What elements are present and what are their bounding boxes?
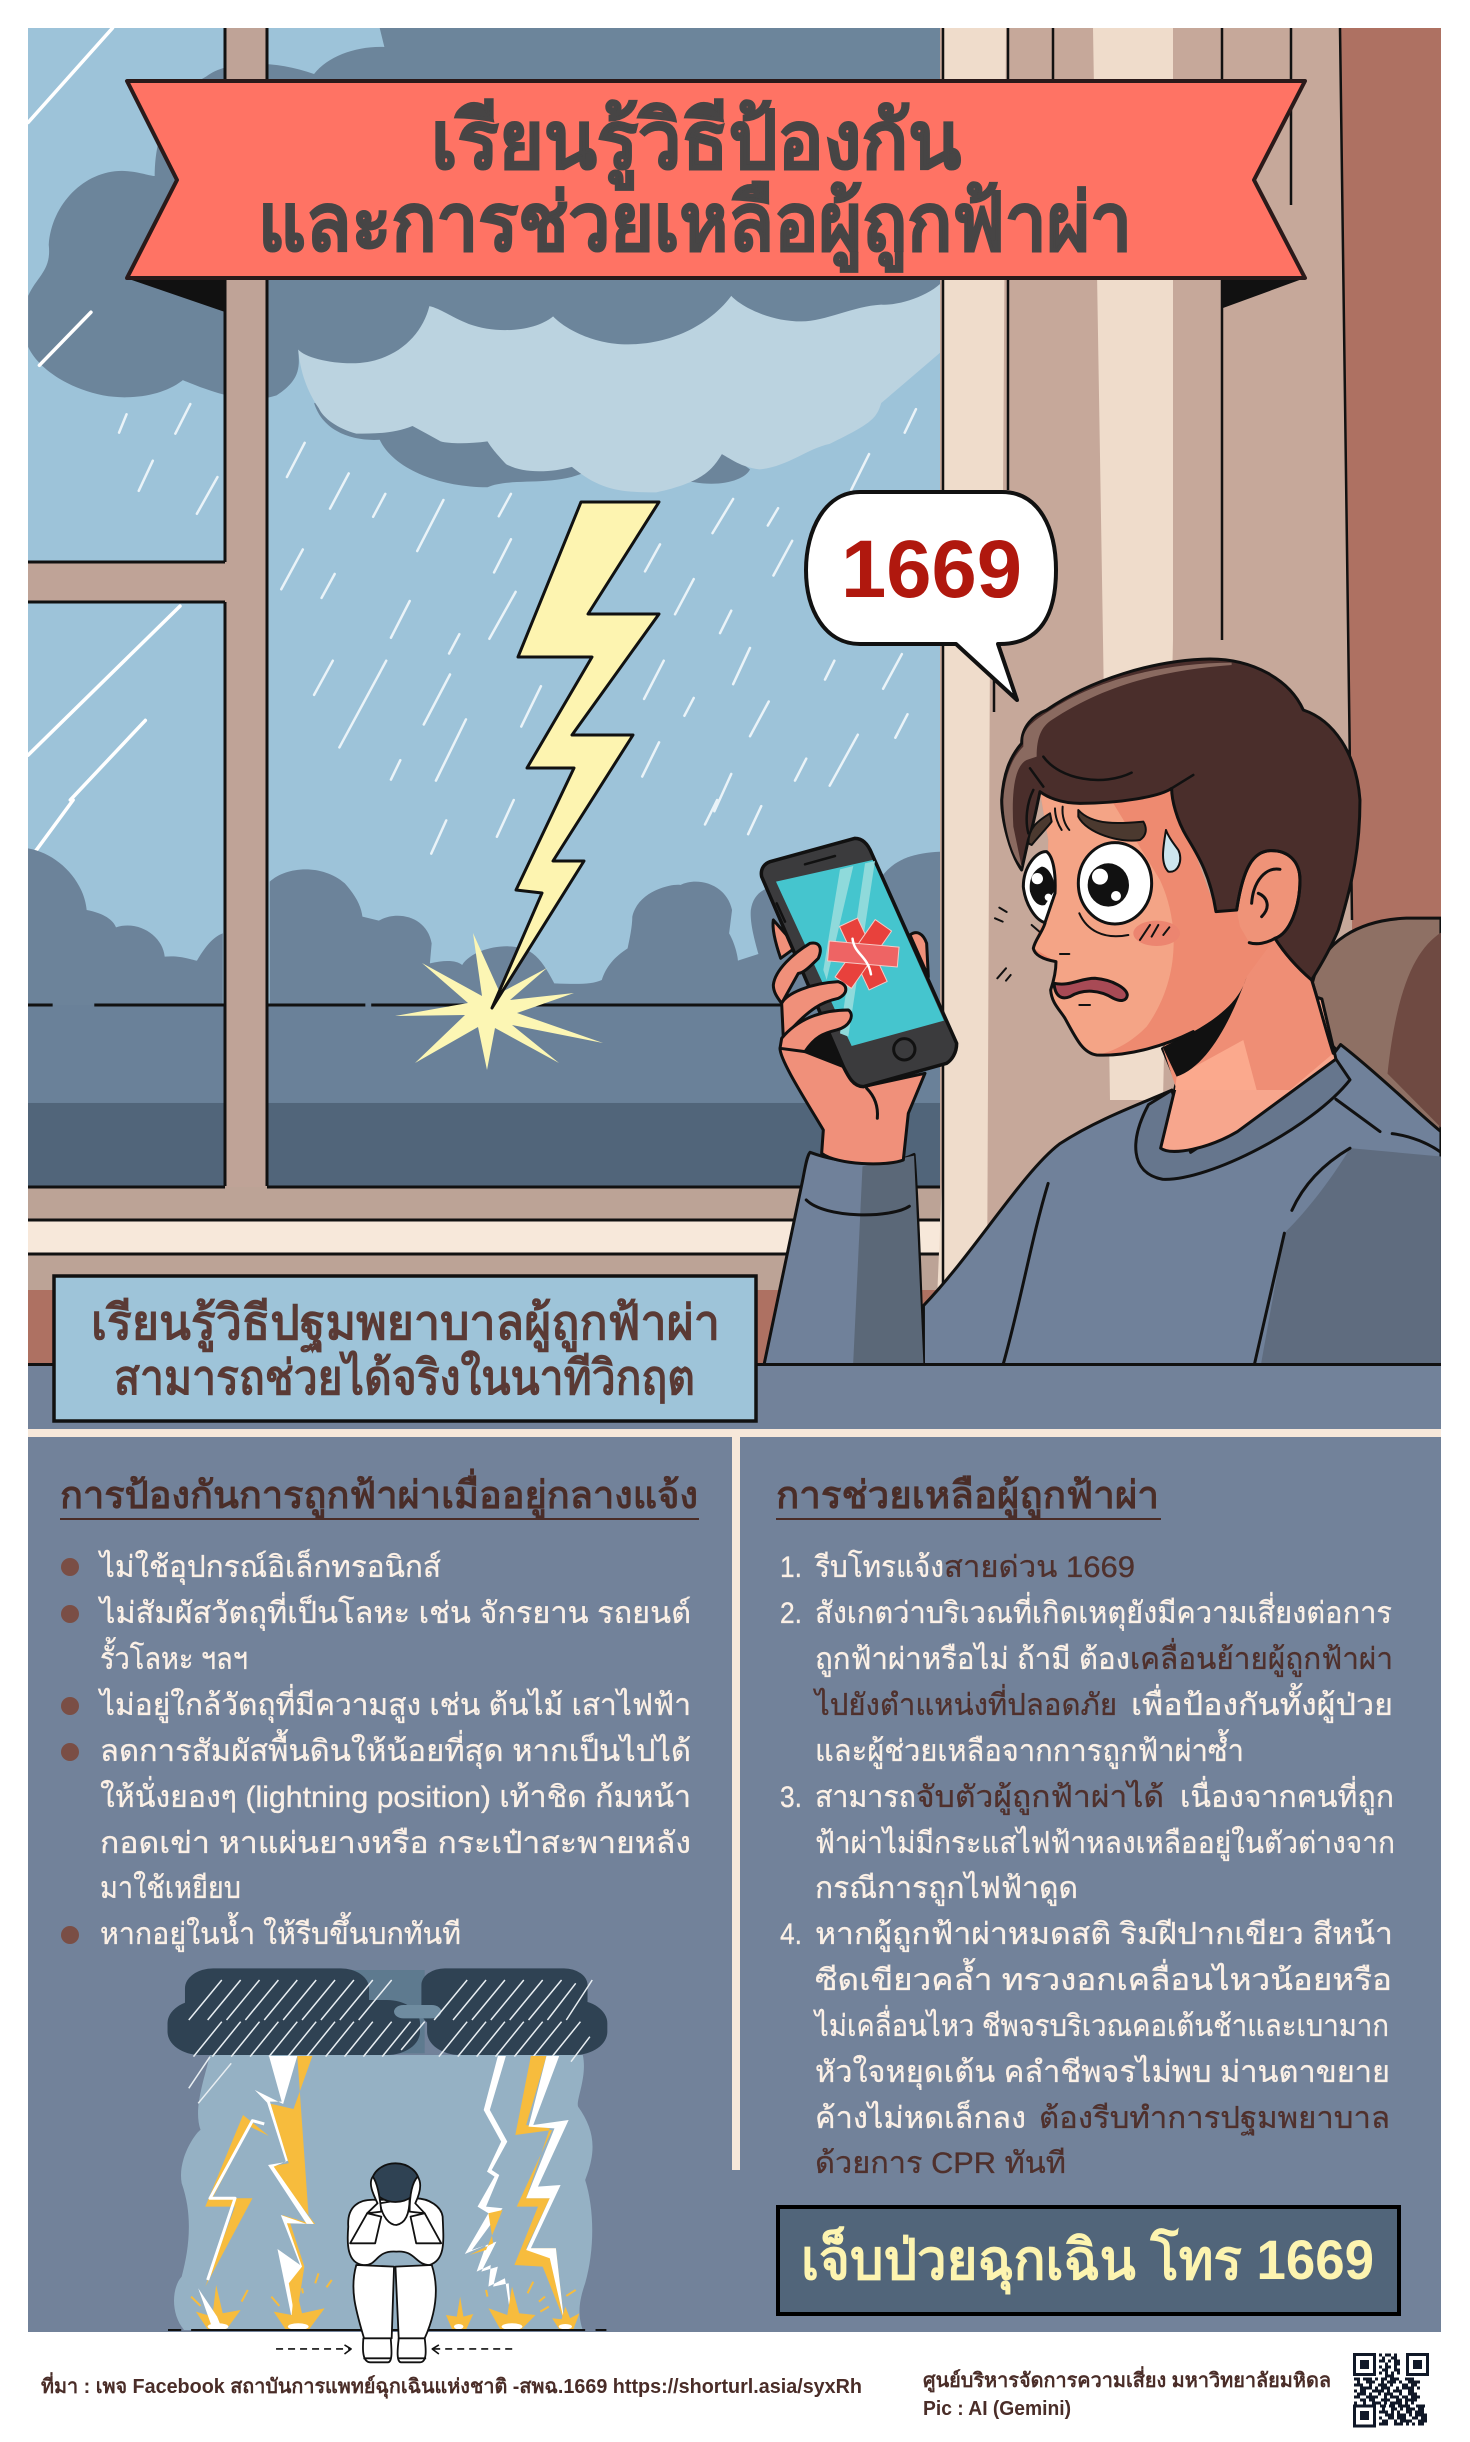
step 2: ถูกฟ้าผ่าหรือไม่ ถ้ามี ต้อง (815, 1641, 1130, 1677)
icon: smartphone (761, 838, 957, 1087)
distance arrows (276, 2345, 515, 2354)
step 1 (780, 1549, 1135, 1584)
bullet list: กอดเข่า หาแผ่นยางหรือ กระเป๋าสะพายหลัง (100, 1827, 691, 1860)
fingers (773, 943, 851, 1067)
slate band under scene (28, 1363, 1441, 1429)
step 4: ด้วยการ CPR ทันที (815, 2147, 1066, 2180)
speech bubble 1669 (806, 492, 1056, 700)
title line 1: เรียนรู้วิธีป้องกัน (431, 96, 961, 191)
storm clouds (168, 1968, 607, 2103)
back fingers (773, 920, 928, 977)
step 3: ฟ้าผ่าไม่มีกระแสไฟฟ้าหลงเหลืออยู่ในตัวต่างจาก (815, 1825, 1395, 1861)
ground bursts (191, 2273, 579, 2330)
ground line (168, 2329, 606, 2331)
step 2: ไปยังตำแหน่งที่ปลอดภัย (813, 1684, 1117, 1722)
icon: lightning bolt and strike (395, 502, 659, 1070)
organisation and picture credit: ศูนย์บริหารจัดการความเสี่ยง มหาวิทยาลัยมหิดล (923, 2365, 1331, 2394)
illustration: lightning position (168, 1968, 607, 2362)
window frame (28, 28, 943, 1365)
storm clouds (28, 28, 947, 492)
step 3: 3. (780, 1781, 802, 1814)
heading: first aid: การช่วยเหลือผู้ถูกฟ้าผ่า (776, 1475, 1159, 1519)
step 4: หากผู้ถูกฟ้าผ่าหมดสติ ริมฝีปากเขียว สีหน้า (815, 1918, 1393, 1952)
QR code (1354, 2354, 1428, 2426)
step 3: จับตัวผู้ถูกฟ้าผ่าได้ (916, 1779, 1164, 1815)
neck upper (1163, 938, 1333, 1090)
bullet list: มาใช้เหยียบ (100, 1871, 241, 1905)
brows and forehead marks (1028, 807, 1146, 845)
sweat drop (1163, 830, 1180, 872)
face (1033, 788, 1275, 1055)
step 4: ไม่เคลื่อนไหว ชีพจรบริเวณคอเต้นช้าและเบามาก (813, 2005, 1389, 2043)
man on the phone: head (995, 659, 1360, 1090)
bullet list (61, 1548, 691, 1952)
step 4 (780, 1918, 1393, 2180)
caption box (54, 1276, 756, 1421)
blue haze (174, 2055, 593, 2330)
neck (1161, 974, 1336, 1151)
organisation and picture credit (923, 2365, 1331, 2420)
step 3 (780, 1776, 1395, 1906)
hand (778, 1048, 926, 1166)
sleeve (764, 1152, 923, 1365)
emergency callout (778, 2207, 1399, 2314)
step 2: สังเกตว่าบริเวณที่เกิดเหตุยังมีความเสี่ยงต่อการ (815, 1592, 1392, 1632)
heading: prevention: การป้องกันการถูกฟ้าผ่าเมื่ออยู่กลางแจ้ง (60, 1468, 698, 1519)
step 1: รีบโทรแจ้ง (814, 1549, 944, 1584)
step 1: 1. (780, 1551, 802, 1584)
speech bubble 1669: 1669 (841, 524, 1022, 615)
step 4: ค้างไม่หดเล็กลง (815, 2099, 1026, 2135)
step 4: ต้องรีบทำการปฐมพยาบาล (1039, 2102, 1390, 2136)
step 4: หัวใจหยุดเต้น คลำชีพจรไม่พบ ม่านตาขยาย (815, 2054, 1390, 2091)
panel: prevention outdoors (60, 1468, 699, 2362)
bullet list: ให้นั่งยองๆ (lightning position) เท้าชิด ก้มหน้า (100, 1776, 691, 1814)
curtain and wall (937, 28, 1441, 1300)
caption box: สามารถช่วยได้จริงในนาทีวิกฤต (114, 1349, 695, 1405)
bullet list: ไม่ใช้อุปกรณ์อิเล็กทรอนิกส์ (98, 1548, 441, 1586)
bullet list: รั้วโลหะ ฯลฯ (100, 1637, 248, 1676)
ear lines (1237, 851, 1300, 944)
bullet list: ลดการสัมผัสพื้นดินให้น้อยที่สุด หากเป็นไปได้ (100, 1729, 691, 1770)
man on the phone: body (764, 918, 1441, 1365)
bullet list: ไม่อยู่ใกล้วัตถุที่มีความสูง เช่น ต้นไม้ เสาไฟฟ้า (98, 1684, 691, 1724)
hair (1002, 659, 1360, 980)
source credit: ที่มา : เพจ Facebook สถาบันการแพทย์ฉุกเฉินแห่งชาติ -สพฉ.1669 https://shorturl.asia/syxRh (41, 2371, 862, 2399)
lightning bolts (205, 2056, 569, 2327)
panel: helping victims (776, 1475, 1399, 2314)
sky and window panes (28, 28, 948, 1188)
chair (1313, 918, 1441, 1132)
step 4: 4. (780, 1918, 802, 1951)
icon: star of life on phone (827, 918, 900, 990)
bullet list: ไม่สัมผัสวัตถุที่เป็นโลหะ เช่น จักรยาน รถยนต์ (98, 1592, 691, 1632)
distant clouds and sea (28, 848, 948, 1186)
step 2: 2. (780, 1597, 802, 1630)
step 2: เพื่อป้องกันทั้งผู้ป่วย (1131, 1683, 1393, 1723)
step 2: เคลื่อนย้ายผู้ถูกฟ้าผ่า (1130, 1638, 1393, 1677)
man on the phone: hand and smartphone (761, 838, 957, 1164)
sweater (923, 1045, 1441, 1365)
step 3: กรณีการถูกไฟฟ้าดูด (815, 1870, 1078, 1906)
step 3: เนื่องจากคนที่ถูก (1180, 1776, 1394, 1815)
crouching person (348, 2163, 443, 2362)
title banner (126, 81, 1305, 312)
rain streaks (28, 28, 916, 859)
organisation and picture credit: Pic : AI (Gemini) (923, 2398, 1071, 2420)
step 2 (780, 1592, 1393, 1769)
step 4: ซีดเขียวคล้ำ ทรวงอกเคลื่อนไหวน้อยหรือ (815, 1958, 1392, 1997)
title line 2: และการช่วยเหลือผู้ถูกฟ้าผ่า (258, 178, 1132, 273)
ear (1237, 851, 1300, 944)
emergency callout: เจ็บป่วยฉุกเฉิน โทร 1669 (801, 2225, 1374, 2295)
step 2: และผู้ช่วยเหลือจากการถูกฟ้าผ่าซ้ำ (815, 1729, 1244, 1769)
hero illustration: window scene (28, 28, 1441, 1365)
eyes (1023, 843, 1152, 924)
step 3: สามารถ (815, 1781, 916, 1814)
eye bag, blush lines, mouth and nose marks (995, 908, 1169, 1005)
content background and divider (28, 1429, 1441, 2332)
caption box: เรียนรู้วิธีปฐมพยาบาลผู้ถูกฟ้าผ่า (91, 1297, 720, 1354)
jaw shadow (1163, 977, 1247, 1077)
step 1: สายด่วน 1669 (944, 1551, 1135, 1584)
bullet list: หากอยู่ในน้ำ ให้รีบขึ้นบกทันที (100, 1912, 461, 1952)
